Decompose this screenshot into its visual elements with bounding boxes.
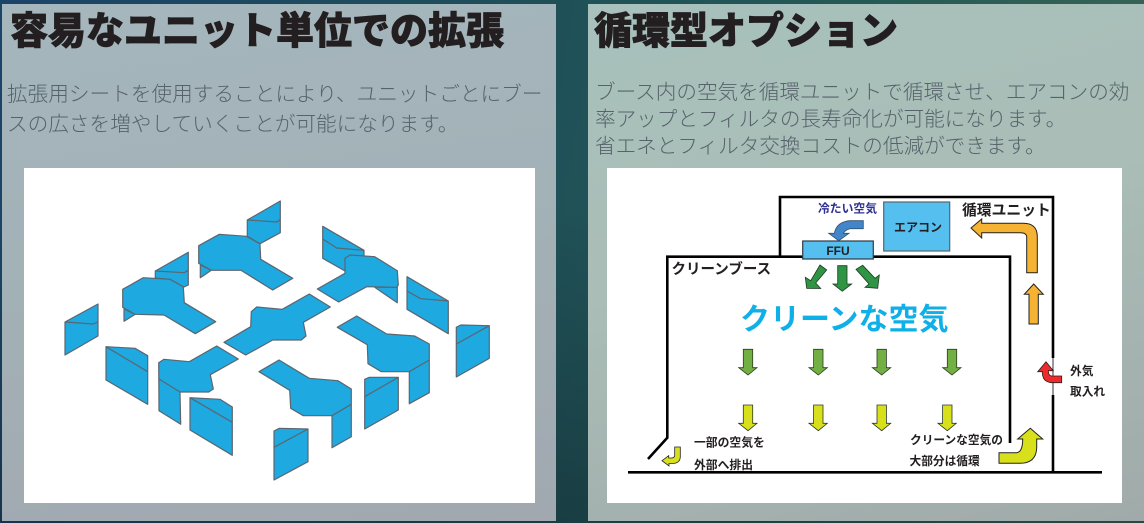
arrow: outside air intake [1038, 362, 1062, 383]
icon: front-left wall panel [190, 398, 232, 455]
arrow: recirculated air rising [1024, 284, 1043, 324]
label: outside air intake: 取入れ [1070, 386, 1105, 399]
panel: unit expansion [2, 4, 556, 521]
icon: right-front roof unit [337, 316, 429, 404]
icon: rear wall panel [247, 201, 280, 244]
icon: left roof unit [123, 278, 216, 334]
icon: front roof unit [259, 360, 351, 448]
label: partial exhaust: 一部の空気を [694, 436, 765, 450]
text block: recirculation description: 省エネとフィルタ交換コストの低減ができます。 [595, 135, 1046, 158]
component: FFU: FFU [826, 244, 850, 258]
heading: clean air: クリーンな空気 [740, 304, 948, 336]
icon: left wall panel [106, 347, 148, 404]
arrows: downflow yellow row [739, 405, 956, 431]
label: clean booth: クリーンブース [672, 260, 771, 278]
icon: front-left roof unit [159, 346, 238, 424]
panel: recirculation option [588, 4, 1144, 521]
arrows: downflow green row [739, 349, 961, 375]
arrow: exhaust to outside [662, 447, 680, 466]
icon: front wall panel [274, 428, 308, 480]
icon: center roof unit [224, 294, 330, 355]
label: most air recirculated: 大部分は循環 [910, 454, 980, 468]
icon: far-left wall panel [65, 304, 98, 355]
title: unit expansion: 容易なユニット単位での拡張 [10, 11, 504, 53]
component: air conditioner: エアコン [894, 221, 942, 235]
title: recirculation option: 循環型オプション [594, 11, 898, 53]
label: most air recirculated [910, 433, 1003, 468]
icon: rear-left wall panel [155, 252, 188, 287]
arrow: recirculated air to air conditioner [971, 219, 1037, 273]
icon: far-right wall panel [456, 325, 489, 377]
diagram: air recirculation [607, 168, 1122, 503]
diagram: exploded booth units [24, 168, 535, 503]
label: outside air intake: 外気 [1070, 364, 1094, 378]
label: partial exhaust: 外部へ排出 [694, 458, 753, 472]
label: partial exhaust [694, 436, 765, 472]
arrow: cold air into FFU [829, 221, 863, 241]
icon: rear roof unit [199, 234, 293, 290]
label: cold air: 冷たい空気 [818, 202, 877, 216]
arrow: return to recirculation [999, 428, 1043, 463]
label: most air recirculated: クリーンな空気の [910, 433, 1003, 447]
structure: booth outline [628, 197, 1102, 472]
text block: unit expansion description: スの広さを増やしていくことが可能になります。 [7, 112, 458, 136]
label: outside air intake [1070, 364, 1105, 399]
icon: right-rear roof unit [317, 255, 398, 303]
text block: recirculation description: 率アップとフィルタの長寿命化が可能になります。 [595, 108, 1066, 131]
icon: front-right wall panel [365, 377, 398, 429]
icon: rear-right wall panel [323, 226, 364, 271]
text block: unit expansion description [7, 82, 542, 136]
text block: unit expansion description: 拡張用シートを使用することにより、ユニットごとにブー [7, 82, 542, 106]
text block: recirculation description: ブース内の空気を循環ユニットで循環させ、エアコンの効 [595, 81, 1129, 104]
component: air conditioner [884, 202, 950, 251]
component: FFU [803, 241, 873, 259]
icon: right wall panel [407, 277, 448, 334]
arrows: FFU outflow [805, 265, 879, 291]
label: recirculation unit: 循環ユニット [962, 201, 1051, 219]
text block: recirculation description [595, 81, 1129, 158]
